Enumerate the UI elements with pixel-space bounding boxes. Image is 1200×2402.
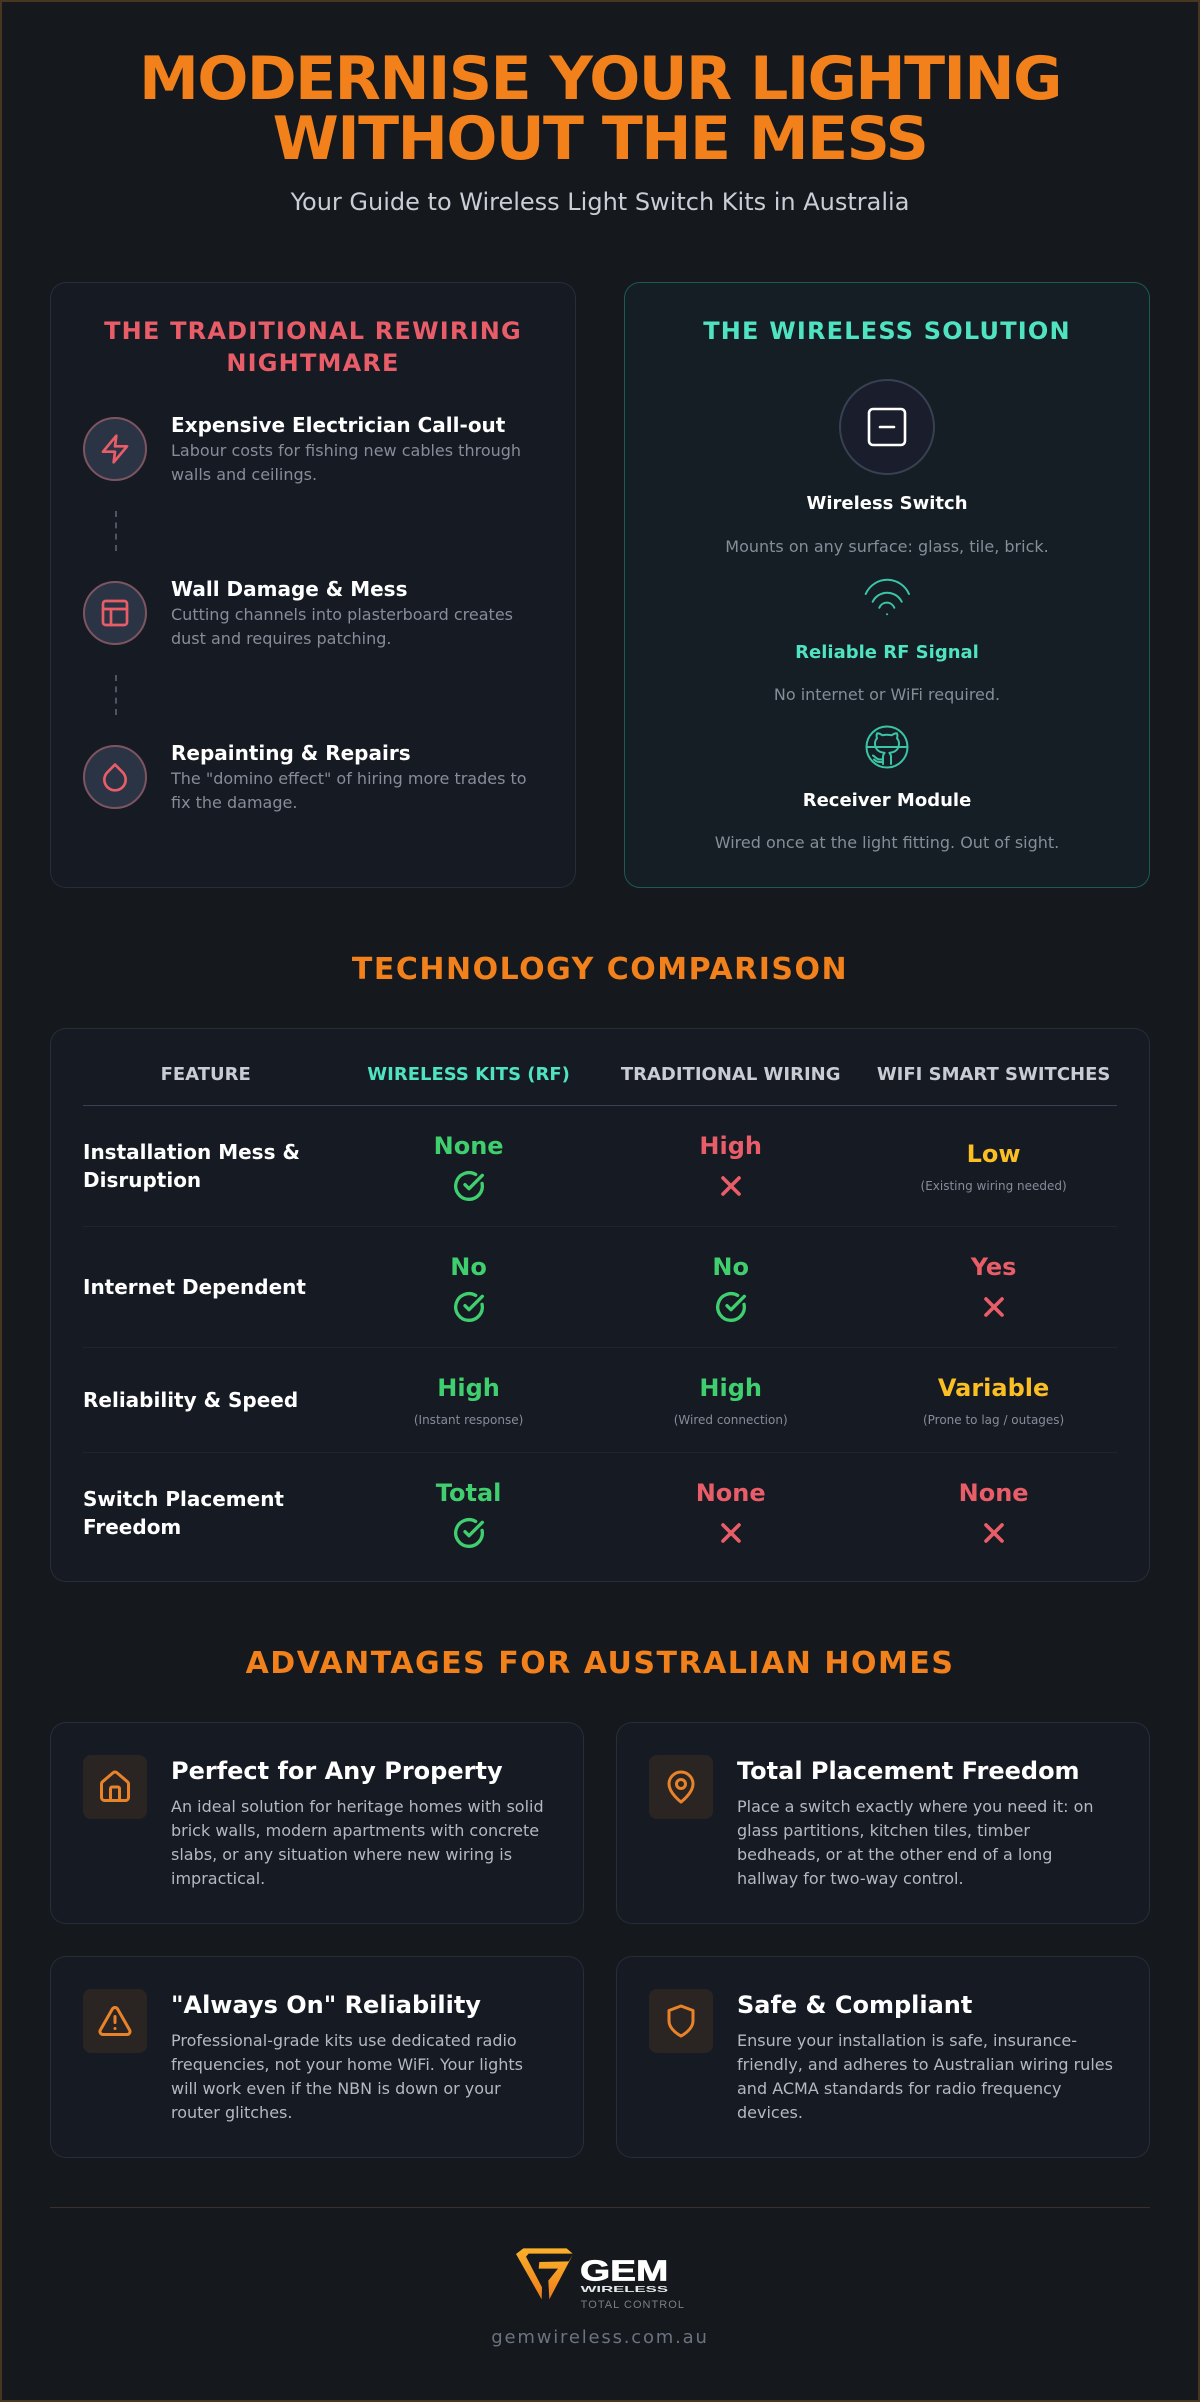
- column header: feature: FEATURE: [161, 1064, 251, 1085]
- icon: shield: [649, 1989, 713, 2053]
- item title: electrician: Expensive Electrician Call-out: [171, 413, 505, 437]
- note: wired: (Wired connection): [674, 1413, 788, 1427]
- card text: friendly, and adheres to Australian wiring rules: [737, 2055, 1113, 2074]
- text: receiver: Wired once at the light fitting. Out of sight.: [715, 833, 1059, 852]
- logo wordmark: [580, 2256, 684, 2311]
- logo wordmark: GEM: [580, 2256, 668, 2288]
- icon: cross: [984, 1297, 1004, 1317]
- panel heading: traditional: [104, 317, 522, 377]
- column header: traditional: TRADITIONAL WIRING: [621, 1064, 841, 1085]
- item title: wall damage: Wall Damage & Mess: [171, 577, 407, 601]
- cell: no: No: [450, 1253, 487, 1281]
- icon: cross: [984, 1523, 1004, 1543]
- heading: technology comparison: TECHNOLOGY COMPARISON: [352, 952, 848, 987]
- row label: reliability: Reliability & Speed: [83, 1388, 298, 1412]
- item text: electrician: [171, 441, 521, 484]
- card text: An ideal solution for heritage homes with solid: [171, 1797, 544, 1816]
- row label: installation: Installation Mess &: [83, 1140, 300, 1164]
- item text: repainting: [170, 769, 527, 812]
- icon: paint drop: [83, 745, 147, 809]
- cell: variable: Variable: [938, 1374, 1049, 1402]
- icon: wifi signal: [864, 578, 910, 616]
- icon: house: [83, 1755, 147, 1819]
- icon: receiver module: [866, 726, 908, 768]
- logo: [516, 2248, 684, 2311]
- icon: check: [454, 1292, 484, 1322]
- note: instant: (Instant response): [414, 1413, 523, 1427]
- title: [139, 44, 1061, 174]
- text: RF signal: No internet or WiFi required.: [774, 685, 1000, 704]
- card text: bedheads, or at the other end of a long: [737, 1845, 1052, 1864]
- icon: check: [454, 1518, 484, 1548]
- icon: check: [454, 1170, 484, 1201]
- card text: Ensure your installation is safe, insurance-: [737, 2031, 1077, 2050]
- icon: cross: [721, 1523, 741, 1543]
- title: MODERNISE YOUR LIGHTING: [139, 44, 1061, 114]
- item text: wall damage: [171, 605, 513, 648]
- card text: glass partitions, kitchen tiles, timber: [737, 1821, 1030, 1840]
- cell: none: None: [434, 1132, 504, 1160]
- panel: always on: [50, 1956, 584, 2158]
- card text: [171, 1797, 544, 1888]
- panel heading: traditional: NIGHTMARE: [226, 349, 400, 377]
- item text: wall damage: dust and requires patching.: [171, 629, 391, 648]
- cell: no: No: [712, 1253, 749, 1281]
- heading: advantages: ADVANTAGES FOR AUSTRALIAN HOMES: [246, 1646, 954, 1681]
- note: existing wiring: (Existing wiring needed): [921, 1179, 1067, 1193]
- card text: Professional-grade kits use dedicated radio: [171, 2031, 517, 2050]
- cell: total: Total: [436, 1479, 501, 1507]
- label: RF signal: Reliable RF Signal: [795, 642, 979, 663]
- cell: high: High: [699, 1132, 762, 1160]
- row label: installation: [83, 1140, 300, 1192]
- panel: placement freedom: [616, 1722, 1150, 1924]
- logo wordmark: WIRELESS: [581, 2284, 669, 2294]
- logo mark: [516, 2248, 573, 2299]
- logo wordmark: TOTAL CONTROL: [581, 2299, 684, 2311]
- title: WITHOUT THE MESS: [273, 104, 927, 174]
- card text: router glitches.: [171, 2103, 292, 2122]
- label: receiver: Receiver Module: [803, 790, 971, 811]
- icon: warning triangle: [83, 1989, 147, 2053]
- icon: check: [716, 1292, 746, 1322]
- card text: brick walls, modern apartments with concrete: [171, 1821, 539, 1840]
- column header: wireless: WIRELESS KITS (RF): [367, 1064, 570, 1085]
- card text: Place a switch exactly where you need it: on: [737, 1797, 1094, 1816]
- cell: yes: Yes: [971, 1253, 1016, 1281]
- card text: devices.: [737, 2103, 803, 2122]
- row label: placement: Freedom: [83, 1515, 181, 1539]
- card title: "Always On" Reliability: [171, 1991, 481, 2019]
- panel: traditional rewiring: [50, 282, 576, 888]
- item text: repainting: fix the damage.: [171, 793, 297, 812]
- panel: safe and compliant: [616, 1956, 1150, 2158]
- card text: impractical.: [171, 1869, 265, 1888]
- card text: slabs, or any situation where new wiring is: [171, 1845, 512, 1864]
- panel: any property: [50, 1722, 584, 1924]
- row label: placement: Switch Placement: [83, 1487, 284, 1511]
- note: prone to lag: (Prone to lag / outages): [923, 1413, 1064, 1427]
- panel: wireless solution: [624, 282, 1150, 888]
- comparison table: [50, 1028, 1150, 1582]
- row label: installation: Disruption: [83, 1168, 201, 1192]
- icon: lightning: [83, 417, 147, 481]
- card text: [171, 2031, 523, 2122]
- icon: wireless switch: [839, 379, 935, 475]
- card text: will work even if the NBN is down or your: [171, 2079, 501, 2098]
- label: wireless switch: Wireless Switch: [806, 493, 968, 514]
- card title: Safe & Compliant: [737, 1991, 972, 2019]
- card title: Perfect for Any Property: [171, 1757, 503, 1785]
- website url: gemwireless.com.au: [491, 2327, 709, 2348]
- card text: hallway for two-way control.: [737, 1869, 964, 1888]
- panel heading: traditional: THE TRADITIONAL REWIRING: [104, 317, 522, 345]
- row label: placement: [83, 1487, 284, 1539]
- cell: high: High: [437, 1374, 500, 1402]
- panel heading: wireless: THE WIRELESS SOLUTION: [703, 317, 1071, 345]
- cell: none: None: [959, 1479, 1029, 1507]
- icon: cross: [721, 1176, 741, 1196]
- card text: and ACMA standards for radio frequency: [737, 2079, 1061, 2098]
- column header: wifi: WIFI SMART SWITCHES: [877, 1064, 1110, 1085]
- card text: [737, 1797, 1094, 1888]
- cell: low: Low: [967, 1140, 1021, 1168]
- icon: map pin: [649, 1755, 713, 1819]
- card title: Total Placement Freedom: [737, 1757, 1080, 1785]
- row label: internet: Internet Dependent: [83, 1275, 306, 1299]
- item text: repainting: The "domino effect" of hiring more trades to: [171, 769, 527, 788]
- item text: electrician: walls and ceilings.: [171, 465, 317, 484]
- item title: repainting: Repainting & Repairs: [171, 741, 411, 765]
- card text: frequencies, not your home WiFi. Your lights: [171, 2055, 523, 2074]
- text: wireless switch: Mounts on any surface: glass, tile, brick.: [725, 537, 1049, 556]
- item text: wall damage: Cutting channels into plasterboard creates: [171, 605, 513, 624]
- cell: none: None: [696, 1479, 766, 1507]
- card text: [737, 2031, 1113, 2122]
- icon: wall layout: [83, 581, 147, 645]
- item text: electrician: Labour costs for fishing new cables through: [171, 441, 521, 460]
- subtitle: Your Guide to Wireless Light Switch Kits in Australia: [291, 188, 909, 216]
- cell: high: High: [699, 1374, 762, 1402]
